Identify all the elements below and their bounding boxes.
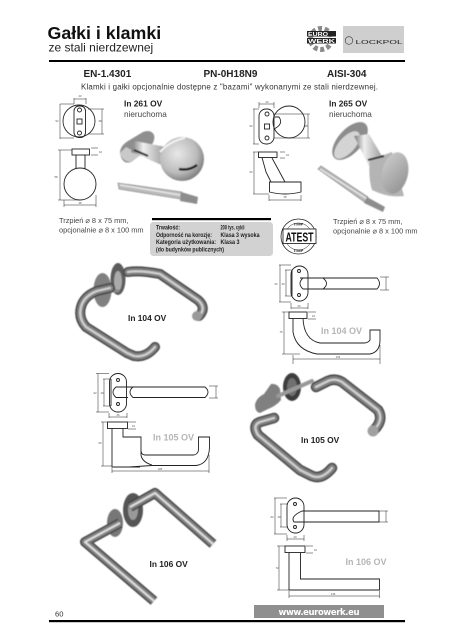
drawing: In 104 OV: 10 — [312, 314, 316, 318]
drawing: In 106 OV — [270, 498, 388, 598]
drawing: In 104 OV: 20 — [297, 304, 301, 308]
drawing: In 105 OV: 49 — [100, 391, 104, 395]
drawing: In 261 OV — [54, 94, 104, 207]
label: In 106 OV photo: In 106 OV — [150, 559, 188, 569]
label: In 105 OV drawing: In 105 OV — [153, 432, 194, 442]
panel: specifications: Klasa 3 wysoka — [220, 232, 260, 239]
photo: knob In 261 OV — [120, 131, 204, 181]
footer website band — [254, 605, 384, 618]
label: In 261 OV — [124, 98, 167, 119]
drawing: In 265 OV: 52 — [249, 124, 253, 128]
label: In 104 OV drawing: In 104 OV — [321, 326, 362, 336]
drawing: In 106 OV: 49 — [277, 515, 281, 519]
label: In 265 OV: nieruchoma — [329, 110, 372, 119]
drawing: In 106 OV: 135 — [331, 592, 336, 596]
panel: specifications: Trwałość: — [156, 224, 180, 232]
drawing: In 261 OV: 10 — [99, 150, 103, 154]
drawing: In 261 OV: 52 — [55, 119, 59, 123]
photo: handle In 104 OV — [80, 263, 203, 356]
drawing: In 106 OV: 72 — [275, 566, 279, 570]
drawing: In 104 OV — [274, 265, 389, 364]
panel: specifications — [150, 218, 273, 256]
text: spindle left: opcjonalnie ⌀ 8 x 100 mm — [59, 226, 144, 234]
drawing: In 265 OV: 38 — [304, 124, 308, 128]
footer website band: www.eurowerk.eu — [278, 608, 360, 618]
drawing: In 105 OV: 186 — [158, 467, 163, 471]
note about bases: Klamki i gałki opcjonalnie dostępne z "bazami" wykonanymi ze stali nierdzewnej. — [81, 82, 378, 92]
photo: knob In 265 OV — [326, 116, 412, 196]
photo: spindle In 265 OV — [318, 166, 385, 212]
text: spindle right: Trzpień ⌀ 8 x 75 mm, — [333, 217, 402, 226]
panel: specifications: Klasa 3 — [220, 239, 240, 246]
logo: Lockpol: LOCKPOL — [356, 40, 402, 46]
drawing: In 265 OV: 38 — [283, 195, 287, 199]
panel: specifications: Odporność na korozję: — [156, 232, 212, 239]
drawing: In 105 OV: 26 — [116, 413, 120, 417]
drawing: In 105 OV: 62 — [93, 391, 97, 395]
drawing: In 261 OV: 58 — [54, 175, 58, 179]
header rule — [49, 60, 405, 62]
drawing: In 105 OV: 10 — [132, 424, 136, 428]
drawing: In 105 OV: 60 — [98, 441, 102, 445]
subtitle: ze stali nierdzewnej — [48, 40, 153, 54]
photo: handle In 106 OV — [85, 493, 213, 601]
title: Gałki i klamki — [48, 23, 161, 43]
drawing: In 265 OV: 62 — [249, 170, 253, 174]
drawing: In 261 OV: 38 — [98, 119, 102, 123]
photo: handle In 105 OV — [255, 373, 380, 477]
page number: 60 — [55, 610, 63, 618]
text: spindle left — [59, 216, 144, 234]
drawing: In 106 OV: 20 — [293, 535, 297, 539]
panel: specifications: Kategoria użytkowania: — [156, 239, 216, 246]
footer rule — [49, 620, 405, 622]
badge: ATEST — [281, 219, 316, 254]
badge: ATEST: ATEST — [286, 230, 314, 244]
steel grade AISI: AISI-304 — [327, 69, 367, 80]
logo: Lockpol — [343, 26, 404, 53]
drawing: In 104 OV: 49 — [281, 282, 285, 286]
drawing: In 104 OV: 62 — [274, 282, 278, 286]
drawing: In 265 OV: 10 — [286, 153, 290, 157]
logo: Eurowerk: WERK — [308, 39, 335, 45]
drawing: In 104 OV: 154 — [336, 355, 341, 359]
drawing: In 261 OV: 38 — [78, 201, 82, 205]
label: In 261 OV: nieruchoma — [124, 110, 167, 119]
photo: spindle In 261 OV — [118, 183, 198, 204]
text: spindle right — [333, 217, 418, 236]
panel: specifications: 200 tys. cykli — [220, 224, 245, 232]
logo: Eurowerk: EURO — [308, 32, 328, 38]
label: In 265 OV: In 265 OV — [329, 98, 368, 108]
label: In 265 OV — [329, 98, 372, 119]
drawing: In 265 OV: 20 — [265, 100, 269, 104]
label: In 105 OV photo: In 105 OV — [301, 435, 340, 445]
label: In 106 OV drawing: In 106 OV — [346, 557, 387, 567]
label: In 261 OV: In 261 OV — [124, 98, 163, 108]
drawing: In 106 OV: 62 — [270, 515, 274, 519]
badge: ATEST: ITMP — [294, 248, 304, 253]
drawing: In 106 OV: 10 — [314, 548, 318, 552]
steel grade PN: PN-0H18N9 — [204, 69, 258, 80]
logo: Eurowerk — [307, 28, 336, 50]
drawing: In 265 OV — [249, 100, 310, 201]
panel: specifications: (do budynków publicznych) — [156, 246, 224, 254]
drawing: In 104 OV: 75 — [279, 330, 283, 334]
label: In 104 OV photo: In 104 OV — [128, 313, 167, 323]
badge: ATEST: ITMP — [294, 222, 304, 226]
text: spindle right: opcjonalnie ⌀ 8 x 100 mm — [333, 226, 418, 236]
text: spindle left: Trzpień ⌀ 8 x 75 mm, — [59, 216, 128, 225]
steel grade EN: EN-1.4301 — [84, 69, 132, 80]
drawing: In 105 OV — [93, 374, 218, 473]
drawing: In 261 OV: 20 — [78, 94, 82, 98]
